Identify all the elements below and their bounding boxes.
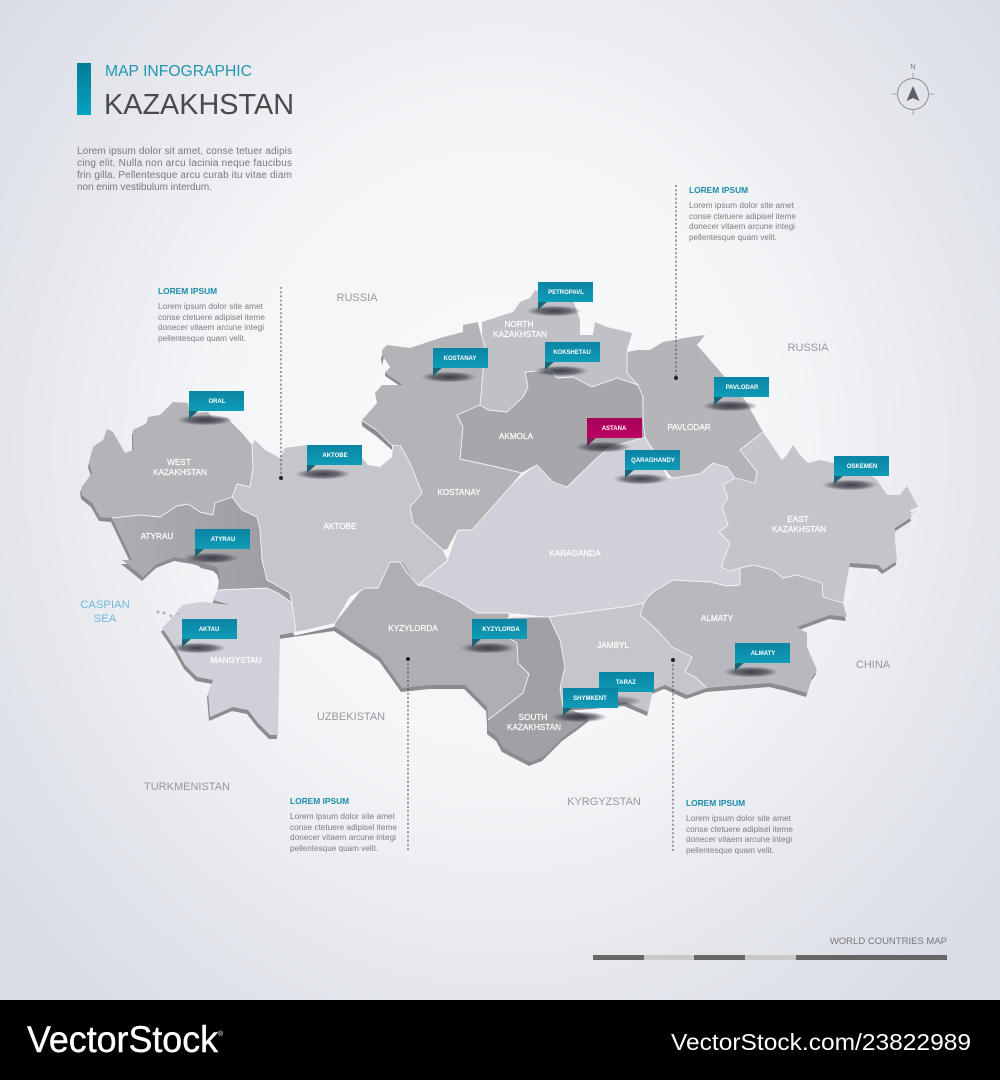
pin: Aktobe: AKTOBE: [322, 453, 348, 459]
pin: Oral: [177, 391, 244, 426]
callout: top right: [689, 185, 797, 242]
intro paragraph: non enim vestibulum interdum.: [77, 182, 212, 193]
region: East Kazakhstan: [719, 432, 918, 603]
pin: Shymkent: SHYMKENT: [573, 696, 607, 702]
map regions: [81, 290, 918, 762]
pin: Taraz: [587, 672, 654, 706]
callout: bottom right: LOREM IPSUM: [686, 798, 745, 808]
region labels: SOUTH: [519, 713, 547, 722]
callout: left: donecer vitaem arcune integi: [158, 323, 264, 332]
callout: left: [158, 286, 266, 343]
intro paragraph: [77, 146, 292, 193]
pin: Shymkent: [551, 688, 618, 722]
sea label: CASPIAN: [80, 599, 130, 611]
callout: left: conse ctetuere adipisel iteme: [158, 313, 266, 322]
title accent bar: [77, 63, 91, 115]
callout: left: pellentesque quam velit.: [158, 334, 246, 343]
subtitle: MAP INFOGRAPHIC: [105, 63, 252, 80]
callout: bottom centre: conse ctetuere adipisel iteme: [290, 823, 398, 832]
region: West Kazakhstan: [81, 402, 253, 518]
callout: bottom right: Lorem ipsum dolor site amet: [686, 814, 792, 823]
pin: Aktobe: [295, 445, 362, 480]
leader lines and dots: [279, 185, 678, 853]
sea label: SEA: [94, 613, 117, 625]
callout: left: Lorem ipsum dolor site amet: [158, 302, 264, 311]
callout: top right: donecer vitaem arcune integi: [689, 222, 795, 231]
scale legend: WORLD COUNTRIES MAP: [830, 936, 947, 947]
callout: top right: pellentesque quam velit.: [689, 233, 777, 242]
region labels: KAZAKHSTAN: [772, 525, 826, 534]
country labels: TURKMENISTAN: [144, 781, 230, 793]
callout: bottom right: pellentesque quam velit.: [686, 846, 774, 855]
country labels: UZBEKISTAN: [317, 711, 385, 723]
pin: Oskemen: [822, 456, 889, 490]
region labels: WEST: [167, 458, 191, 467]
footer bar: VectorStock.com/23822989: [671, 1029, 971, 1055]
callout: bottom right: [686, 798, 794, 855]
pin: Astana capital: ASTANA: [602, 426, 627, 432]
pin: Oskemen: OSKEMEN: [847, 464, 877, 470]
region: Atyrau: [112, 497, 292, 603]
country labels: RUSSIA: [788, 342, 829, 354]
footer bar: [0, 1000, 1000, 1080]
region labels: NORTH: [505, 320, 534, 329]
region labels: JAMBYL: [597, 641, 629, 650]
icon: compass: N: [910, 62, 916, 71]
title: KAZAKHSTAN: [104, 89, 294, 121]
pin: Almaty: ALMATY: [751, 651, 775, 657]
pin: Kokshetau: KOKSHETAU: [553, 350, 591, 356]
pin: Aktau: [170, 619, 237, 654]
region labels: EAST: [787, 515, 809, 524]
callout: bottom centre: Lorem ipsum dolor site amet: [290, 812, 396, 821]
pin: Petropavl: PETROPAVL: [548, 290, 584, 296]
title block: [77, 63, 294, 121]
pin: Kostanay: [421, 348, 488, 382]
pin: Pavlodar: PAVLODAR: [726, 385, 759, 391]
callout: bottom centre: [290, 796, 398, 853]
pin: Kyzylorda: KYZYLORDA: [482, 627, 520, 633]
region labels: ATYRAU: [141, 532, 173, 541]
country labels: KYRGYZSTAN: [567, 796, 641, 808]
region labels: PAVLODAR: [667, 423, 711, 432]
callout: bottom right: conse ctetuere adipisel iteme: [686, 825, 794, 834]
islands: [156, 610, 179, 618]
region labels: MANGYSTAU: [210, 656, 262, 665]
region labels: KAZAKHSTAN: [493, 330, 547, 339]
country labels: RUSSIA: [337, 292, 378, 304]
region: Almaty: [640, 565, 847, 693]
pin: Taraz: TARAZ: [616, 680, 636, 686]
pin: Qaraghandy: QARAGHANDY: [631, 458, 675, 464]
pin: Kokshetau: [533, 342, 600, 376]
pin: Qaraghandy: [613, 450, 680, 484]
callout: left: LOREM IPSUM: [158, 286, 217, 296]
pin: Atyrau: ATYRAU: [211, 537, 235, 543]
intro paragraph: cing elit. Nulla non arcu lacinia neque faucibus: [77, 158, 292, 169]
pin: Oral: ORAL: [208, 399, 226, 405]
country labels: CHINA: [856, 659, 891, 671]
region labels: ALMATY: [701, 614, 734, 623]
callout: bottom right: donecer vitaem arcune integi: [686, 835, 792, 844]
region: South Kazakhstan: [488, 617, 590, 762]
pin: Aktau: AKTAU: [199, 627, 219, 633]
pin: Astana capital: [575, 418, 642, 452]
region: Pavlodar: [627, 335, 763, 483]
region: Karaganda: [418, 437, 740, 617]
footer bar: VectorStock: [27, 1019, 218, 1060]
sea label: [80, 599, 130, 625]
region: Aktobe: [232, 440, 448, 632]
map extrusion: [80, 406, 917, 766]
region labels: AKMOLA: [499, 432, 534, 441]
region labels: KAZAKHSTAN: [153, 468, 207, 477]
callout: top right: LOREM IPSUM: [689, 185, 748, 195]
icon: compass: [892, 62, 934, 115]
region: Kostanay: [362, 322, 522, 550]
callout: top right: conse ctetuere adipisel iteme: [689, 212, 797, 221]
region: Mangystau: [162, 588, 296, 735]
callout: bottom centre: donecer vitaem arcune integi: [290, 833, 396, 842]
region: North Kazakhstan: [480, 290, 638, 412]
pin: Kostanay: KOSTANAY: [444, 356, 476, 362]
region labels: AKTOBE: [323, 522, 357, 531]
region: Akmola: [457, 370, 645, 487]
region: Kyzylorda: [335, 562, 529, 720]
intro paragraph: Lorem ipsum dolor sit amet, conse tetuer adipis: [77, 146, 292, 157]
intro paragraph: frin gilla. Pellentesque arcu curab itu vitae diam: [77, 170, 292, 181]
region labels: KARAGANDA: [549, 549, 601, 558]
region labels: KOSTANAY: [437, 488, 481, 497]
pin: Kyzylorda: [460, 619, 527, 654]
scale legend: [593, 936, 947, 960]
callout: bottom centre: LOREM IPSUM: [290, 796, 349, 806]
callout: bottom centre: pellentesque quam velit.: [290, 844, 378, 853]
region labels: [141, 320, 826, 732]
footer bar: ®: [218, 1030, 224, 1038]
coast details: [191, 352, 403, 606]
pin: Pavlodar: [702, 377, 769, 412]
pin: Almaty: [723, 643, 790, 678]
pin: Atyrau: [183, 529, 250, 564]
region: Jambyl: [549, 603, 707, 712]
internal region borders: [112, 322, 843, 720]
pin: Petropavl: [526, 282, 593, 316]
country labels: [144, 292, 891, 808]
region labels: KAZAKHSTAN: [507, 723, 561, 732]
callout: top right: Lorem ipsum dolor site amet: [689, 201, 795, 210]
region labels: KYZYLORDA: [388, 624, 438, 633]
